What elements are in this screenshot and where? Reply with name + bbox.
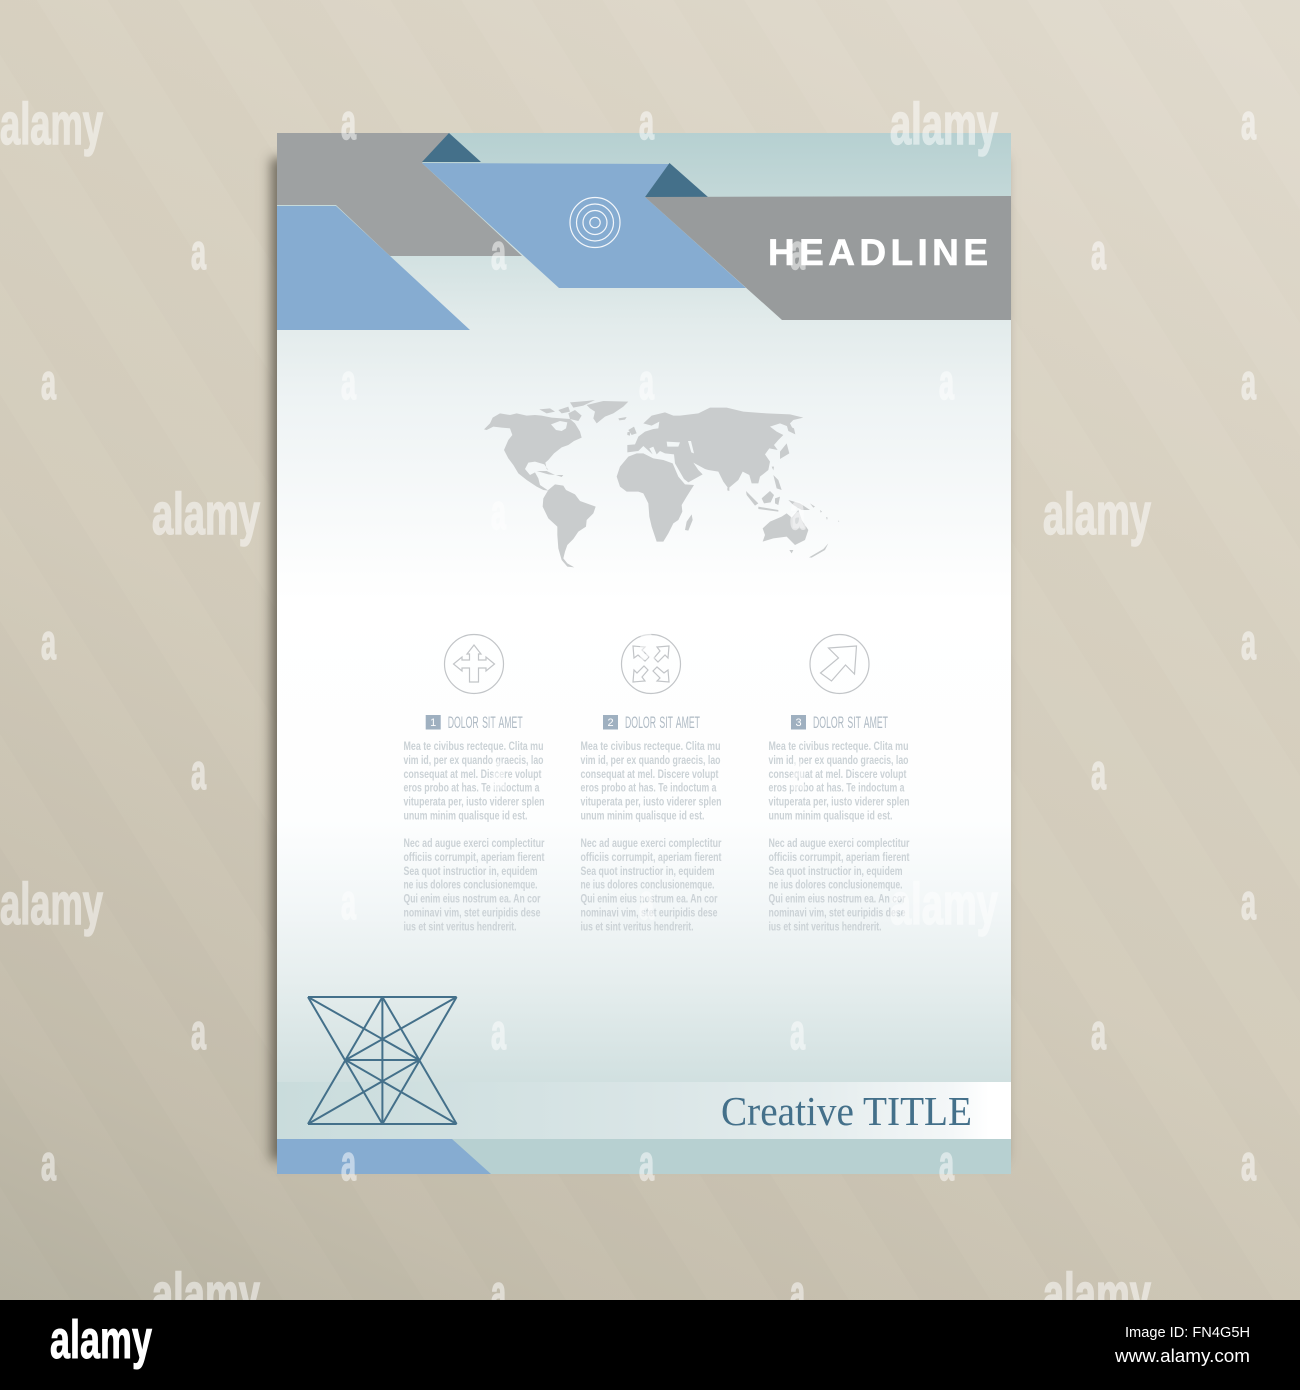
shape: centre blue panel (422, 163, 746, 288)
watermarks: a (491, 744, 507, 800)
icon: four way arrows (444, 634, 504, 694)
watermarks: a (1091, 744, 1107, 800)
watermarks: a (1091, 1004, 1107, 1060)
watermarks: a (639, 874, 655, 930)
label: column 2 heading (603, 713, 700, 732)
shape: bottom blue wedge (277, 1139, 491, 1174)
watermarks: a (790, 1265, 806, 1321)
text: column 2 body: Sea quot instructior in, equidem (580, 866, 714, 878)
column 3 (768, 713, 910, 933)
watermarks: alamy (0, 872, 103, 937)
text: column 1 body: eros probo at has. Te indoctum a (404, 783, 540, 795)
watermarks: a (1241, 874, 1257, 930)
text: column 1 body: ne ius dolores conclusionemque. (404, 880, 538, 892)
logo: alamy: alamy (50, 1310, 152, 1370)
watermarks: alamy (0, 92, 103, 157)
label: column 3 heading (791, 713, 888, 732)
watermarks: a (639, 354, 655, 410)
watermarks: alamy (152, 1262, 260, 1327)
text: column 1 body: unum minim qualisque id est. (404, 810, 528, 822)
watermarks: a (1241, 614, 1257, 670)
text: column 3 body: unum minim qualisque id est. (768, 810, 892, 822)
label: column 3 heading: DOLOR SIT AMET (813, 713, 888, 732)
text: column 1 body: Mea te civibus recteque. Clita mu (404, 741, 544, 753)
text: image id: Image ID: FN4G5H (1125, 1324, 1250, 1341)
watermarks: a (491, 1265, 507, 1321)
watermarks: alamy (152, 482, 260, 547)
text: column 1 body: Qui enim eius nostrum ea. An cor (404, 894, 541, 906)
text: column 1 body: vim id, per ex quando graecis, lao (404, 755, 544, 767)
column 1 (404, 713, 545, 933)
text: column 3 body: Qui enim eius nostrum ea. An cor (768, 894, 906, 906)
icon: geometric lattice (308, 997, 457, 1124)
watermarks: a (939, 614, 955, 670)
text: column 3 body: ius et sint veritus hendrerit. (768, 921, 882, 933)
watermarks: alamy (1043, 1262, 1151, 1327)
label: column 2 heading: 2 (607, 717, 614, 729)
text: column 2 body: eros probo at has. Te indoctum a (580, 783, 717, 795)
text: column 3 body: nominavi vim, stet euripidis dese (768, 908, 906, 920)
text: column 1 body: ius et sint veritus hendrerit. (404, 921, 516, 933)
icon: concentric circles (570, 198, 620, 248)
text: column 2 body: unum minim qualisque id est. (580, 810, 704, 822)
watermarks: alamy (890, 92, 998, 157)
text: column 1 body (404, 741, 545, 933)
text: column 3 body: Nec ad augue exerci complectitur (768, 838, 910, 850)
watermarks: a (1241, 94, 1257, 150)
text: column 3 body (768, 741, 910, 933)
watermarks: a (341, 354, 357, 410)
text: column 1 body: vituperata per, iusto viderer splen (404, 797, 544, 809)
shape: dark triangle left (422, 133, 481, 162)
icon: expanding arrows (622, 634, 680, 694)
text: column 2 body (580, 741, 722, 933)
text: column 1 body: Nec ad augue exerci complectitur (404, 838, 545, 850)
text: column 3 body: Mea te civibus recteque. Clita mu (768, 741, 908, 753)
text: column 3 body: Sea quot instructior in, equidem (768, 866, 902, 878)
text: column 3 body: vituperata per, iusto viderer splen (768, 797, 910, 809)
watermarks: a (939, 1135, 955, 1191)
watermarks: a (639, 1135, 655, 1191)
text: column 3 body: consequat at mel. Discere volupt (768, 769, 907, 781)
label: column 1 heading (426, 713, 523, 732)
text: website: www.alamy.com (1114, 1346, 1250, 1366)
watermarks: a (939, 354, 955, 410)
label: column 1 heading: DOLOR SIT AMET (448, 713, 523, 732)
watermarks: a (41, 354, 57, 410)
text: column 1 body: nominavi vim, stet euripidis dese (404, 908, 540, 920)
text: column 2 body: Mea te civibus recteque. Clita mu (580, 741, 720, 753)
watermarks: a (341, 874, 357, 930)
text: column 3 body: eros probo at has. Te indoctum a (768, 783, 905, 795)
panel: flyer sheet (277, 133, 1011, 1174)
text: column 1 body: Sea quot instructior in, equidem (404, 866, 538, 878)
text: column 1 body: consequat at mel. Discere volupt (404, 769, 542, 781)
watermarks: a (790, 224, 806, 280)
watermarks: a (41, 1135, 57, 1191)
watermarks: a (1091, 224, 1107, 280)
text: column 2 body: Nec ad augue exerci complectitur (580, 838, 722, 850)
panel: black footer bar (0, 1300, 1300, 1390)
watermarks: a (790, 1004, 806, 1060)
shape: upper left blue panel (277, 206, 470, 330)
text: column 2 body: ne ius dolores conclusionemque. (580, 880, 714, 892)
watermarks: a (1241, 354, 1257, 410)
text: column 3 body: officiis corrumpit, aperiam fierent (768, 852, 910, 864)
text: column 2 body: Qui enim eius nostrum ea. An cor (580, 894, 718, 906)
watermarks: a (491, 224, 507, 280)
text: column 2 body: vituperata per, iusto viderer splen (580, 797, 722, 809)
watermarks: a (41, 614, 57, 670)
text: column 2 body: consequat at mel. Discere volupt (580, 769, 719, 781)
watermarks: a (491, 1004, 507, 1060)
column 2 (580, 713, 722, 933)
watermarks: alamy (890, 872, 998, 937)
world map (484, 400, 839, 567)
label: column 3 heading: 3 (795, 717, 802, 729)
shape: upper left grey band (277, 133, 522, 256)
watermarks: a (790, 744, 806, 800)
watermarks: a (191, 744, 207, 800)
text: column 2 body: vim id, per ex quando graecis, lao (580, 755, 720, 767)
text: column 2 body: nominavi vim, stet euripidis dese (580, 908, 718, 920)
shape: dark triangle right (645, 163, 708, 197)
watermarks: a (1241, 1135, 1257, 1191)
watermarks: a (191, 224, 207, 280)
watermarks: a (341, 94, 357, 150)
icon: diagonal arrow (810, 634, 869, 694)
panel: bottom strip (277, 1139, 1011, 1174)
watermarks: a (639, 614, 655, 670)
panel: title band (277, 1082, 1011, 1139)
watermarks: a (491, 484, 507, 540)
text: column 2 body: officiis corrumpit, aperiam fierent (580, 852, 722, 864)
watermarks: alamy (1043, 482, 1151, 547)
text: column 3 body: vim id, per ex quando graecis, lao (768, 755, 908, 767)
title: creative title: Creative TITLE (721, 1088, 972, 1134)
label: column 1 heading: 1 (430, 717, 436, 729)
watermarks: a (341, 1135, 357, 1191)
watermarks: a (191, 1004, 207, 1060)
watermarks: a (341, 614, 357, 670)
panel: headline band (645, 196, 1011, 320)
label: column 2 heading: DOLOR SIT AMET (625, 713, 700, 732)
watermarks: a (639, 94, 655, 150)
watermarks: a (790, 484, 806, 540)
heading: headline: HEADLINE (768, 232, 988, 273)
text: column 2 body: ius et sint veritus hendrerit. (580, 921, 694, 933)
text: column 3 body: ne ius dolores conclusionemque. (768, 880, 902, 892)
text: column 1 body: officiis corrumpit, aperiam fierent (404, 852, 545, 864)
